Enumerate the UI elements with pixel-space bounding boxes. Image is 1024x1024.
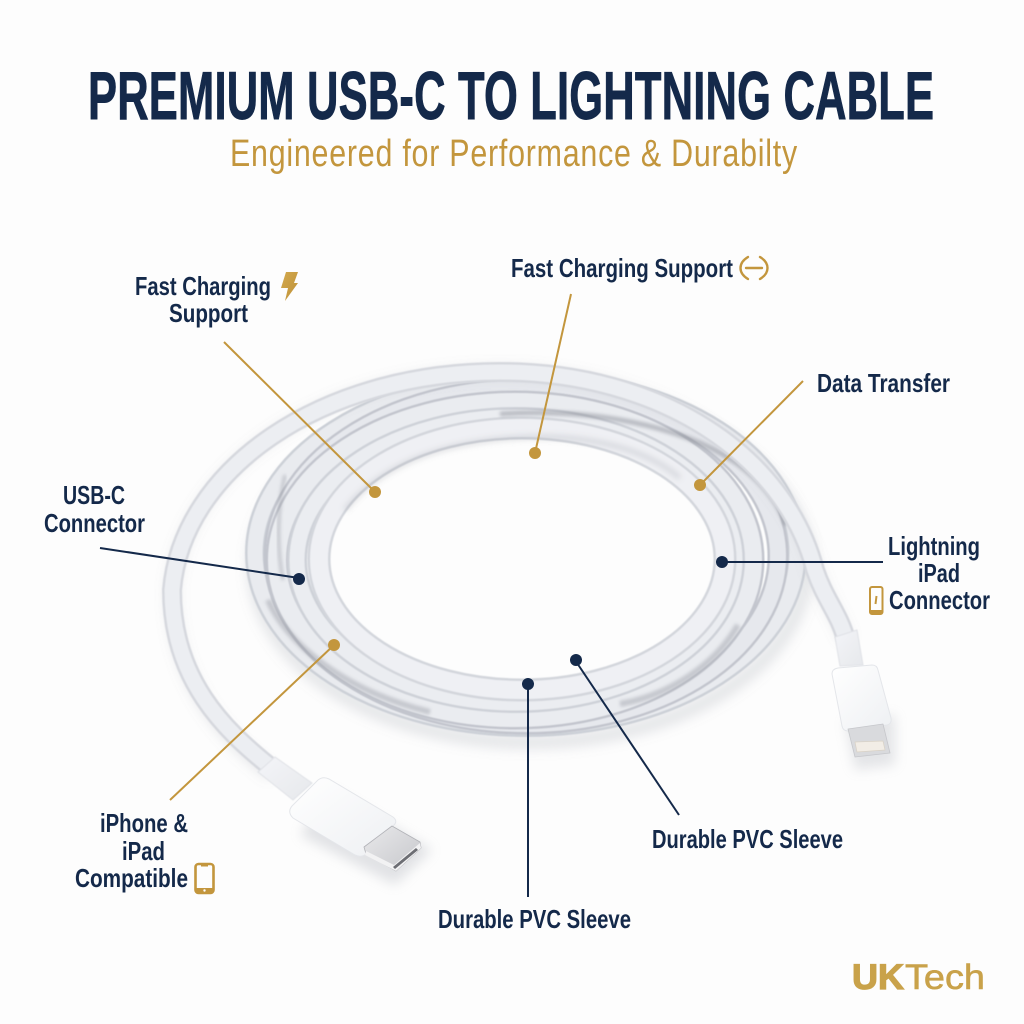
leader: data transfer	[694, 381, 803, 491]
label: Durable PVC Sleeve bottom: Durable PVC Sleeve	[438, 904, 631, 934]
label: Lightning iPad Connector: Connector	[889, 585, 990, 615]
label: Fast Charging Support left: Fast Charging	[135, 271, 271, 301]
label: Data Transfer: Data Transfer	[817, 368, 950, 398]
label: Durable PVC Sleeve right: Durable PVC Sleeve	[652, 824, 843, 854]
label: Lightning iPad Connector	[870, 531, 990, 615]
logo: UK Tech: Tech	[905, 958, 985, 997]
subtitle: Engineered for Performance & Durabilty	[230, 133, 798, 175]
logo: UK Tech: UK	[852, 958, 904, 997]
label: USB-C Connector	[44, 480, 145, 538]
label: Fast Charging Support top: Fast Charging Support	[511, 253, 733, 283]
label: USB-C Connector: USB-C	[63, 480, 125, 510]
label: Lightning iPad Connector: Lightning	[888, 531, 980, 561]
label: iPhone & iPad Compatible	[75, 808, 214, 893]
icon: phone	[196, 864, 214, 893]
gold contact pad	[855, 741, 885, 752]
leader: fast charging left	[224, 342, 381, 498]
icon: phone charging	[870, 587, 882, 614]
label: iPhone & iPad Compatible: iPad	[122, 836, 165, 866]
leader: Lightning	[716, 556, 883, 568]
label: USB-C Connector: Connector	[44, 508, 145, 538]
Lightning connector	[832, 630, 895, 770]
icon: charge ring	[740, 257, 768, 279]
label: Lightning iPad Connector: iPad	[918, 558, 960, 588]
logo: UK Tech	[852, 958, 985, 997]
label: iPhone & iPad Compatible: Compatible	[75, 863, 188, 893]
label: Fast Charging Support left: Support	[169, 298, 248, 328]
leader: PVC sleeve bottom	[522, 678, 534, 897]
coiled white cable	[254, 379, 806, 742]
label: iPhone & iPad Compatible: iPhone &	[100, 808, 188, 838]
leader: fast charging top	[529, 294, 571, 459]
leader: iPhone compatible	[170, 639, 340, 800]
label: Fast Charging Support left	[135, 271, 298, 328]
title: PREMIUM USB-C TO LIGHTNING CABLE	[88, 58, 934, 134]
leader: PVC sleeve right	[570, 654, 679, 815]
icon: lightning bolt	[281, 272, 298, 301]
loose outer cable run	[172, 372, 846, 775]
grooves	[500, 413, 786, 525]
leader: USB-C	[100, 548, 305, 585]
USB-C connector	[258, 757, 432, 885]
